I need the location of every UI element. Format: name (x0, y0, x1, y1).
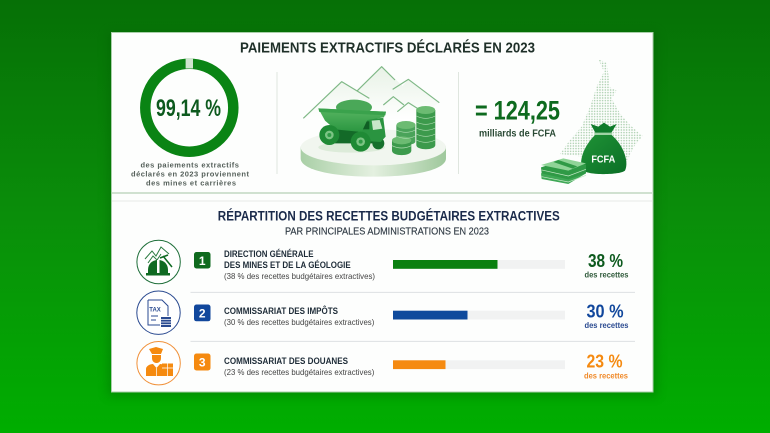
icon: coin stacks (392, 106, 435, 155)
text: commissariat des impôts (224, 305, 374, 327)
text: direction générale (224, 249, 375, 281)
donut chart: 99,14 %: 99,14 % (156, 95, 221, 122)
value: 30 %: des recettes (584, 320, 629, 330)
value: 38 % (584, 250, 629, 279)
text: donut caption: déclarés en 2023 proviennent (131, 169, 250, 178)
illustration: map, bag and banknotes (541, 59, 643, 184)
icon: banknotes (541, 158, 586, 184)
value: 30 %: 30 % (586, 300, 624, 322)
bar: 30 % (393, 311, 565, 320)
text: commissariat des douanes: (23 % des recettes budgétaires extractives) (224, 367, 374, 377)
text: commissariat des impôts: COMMISSARIAT DES IMPÔTS (224, 305, 338, 317)
badge 1: 1 (199, 254, 206, 268)
badge 3: 3 (199, 356, 206, 370)
icon: money bag: FCFA (591, 155, 615, 166)
row 2: impôts (137, 291, 629, 334)
bar: 23 % (393, 360, 565, 369)
text: commissariat des douanes (224, 356, 374, 377)
heading: RÉPARTITION DES RECETTES BUDGÉTAIRES EXTRACTIVES (218, 208, 560, 224)
text: direction générale: DES MINES ET DE LA GÉOLOGIE (224, 260, 351, 271)
panel: budget revenue breakdown (137, 208, 635, 385)
icon: dotted map (560, 59, 643, 162)
icon: customs officer (137, 342, 180, 385)
icon: truck (318, 100, 386, 152)
row 3: douanes (137, 342, 628, 385)
icon: tax document (137, 291, 180, 334)
badge 3 (194, 354, 210, 370)
text: commissariat des impôts: (30 % des recettes budgétaires extractives) (224, 317, 374, 327)
text: donut caption: des mines et carrières (146, 178, 236, 187)
value: 30 % (584, 300, 629, 330)
text: donut caption (131, 160, 250, 187)
icon: tax document: TAX (149, 308, 161, 314)
value: 38 %: 38 % (588, 250, 623, 271)
bar: 38 % (393, 260, 565, 269)
badge 2 (194, 304, 210, 321)
value: 23 % (584, 350, 628, 380)
value: 23 %: des recettes (584, 370, 628, 380)
stat: 124,25 milliards (475, 96, 560, 140)
subheading: PAR PRINCIPALES ADMINISTRATIONS EN 2023 (285, 227, 489, 238)
value: 38 %: des recettes (584, 269, 629, 279)
title: PAIEMENTS EXTRACTIFS DÉCLARÉS EN 2023 (240, 40, 535, 57)
text: commissariat des douanes: COMMISSARIAT DES DOUANES (224, 356, 348, 367)
badge 1 (194, 252, 210, 268)
stat: 124,25 milliards: = 124,25 (475, 96, 560, 126)
icon: mines (137, 240, 180, 284)
text: direction générale: DIRECTION GÉNÉRALE (224, 249, 314, 260)
main card (112, 32, 653, 392)
badge 2: 2 (199, 306, 206, 320)
row 1: mines (137, 240, 629, 284)
illustration: mining truck and coins (301, 67, 446, 177)
value: 23 %: 23 % (586, 350, 622, 372)
icon: platform (301, 129, 446, 177)
icon: mountains (303, 67, 439, 120)
panel: top section (131, 40, 643, 187)
text: donut caption: des paiements extractifs (140, 160, 239, 169)
text: direction générale: (38 % des recettes budgétaires extractives) (224, 271, 375, 281)
stat: 124,25 milliards: milliards de FCFA (479, 128, 556, 140)
donut chart: 99,14 % (145, 58, 233, 152)
